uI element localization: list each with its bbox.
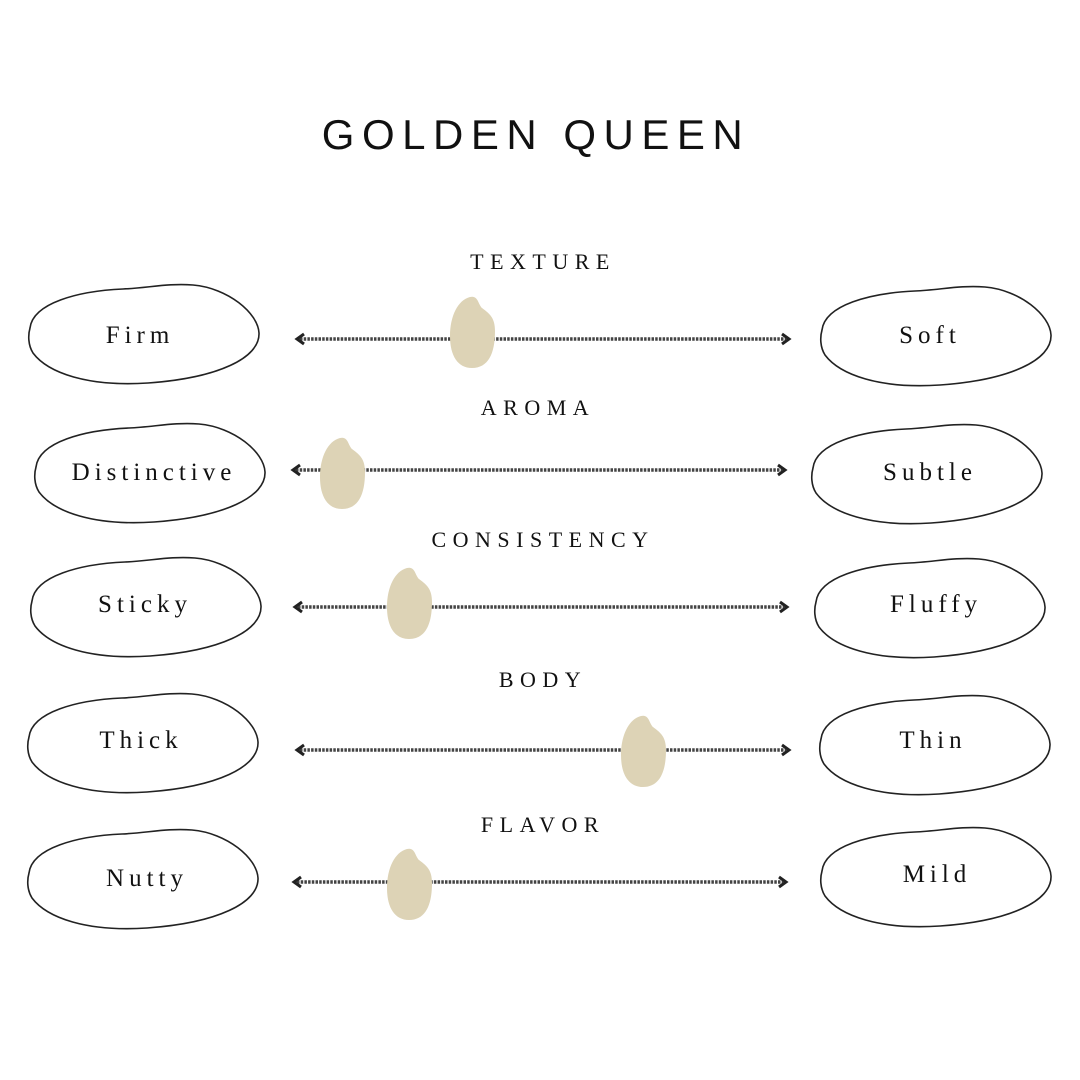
pill: nutty: Nutty xyxy=(106,865,188,892)
row: aroma xyxy=(35,395,1042,524)
pill: mild xyxy=(821,828,1051,927)
heading: aroma: AROMA xyxy=(481,395,595,420)
row: body xyxy=(28,667,1050,795)
pill: distinctive: Distinctive xyxy=(72,459,236,486)
row: texture xyxy=(29,249,1051,386)
title: GOLDEN QUEEN xyxy=(322,111,750,158)
pill: thin: Thin xyxy=(899,727,967,754)
heading: flavor: FLAVOR xyxy=(481,812,605,837)
pill: thick: Thick xyxy=(99,727,183,754)
heading: body: BODY xyxy=(499,667,587,692)
arrow: consistency scale xyxy=(295,602,787,612)
arrow: body scale xyxy=(297,745,789,755)
pill: sticky: Sticky xyxy=(98,591,192,618)
heading: texture: TEXTURE xyxy=(470,249,616,274)
pill: subtle: Subtle xyxy=(883,459,977,486)
pill: nutty xyxy=(28,830,258,929)
pill: soft: Soft xyxy=(899,322,961,349)
pill: soft xyxy=(821,287,1051,386)
pill: firm: Firm xyxy=(106,322,174,349)
pill: fluffy xyxy=(815,559,1045,658)
arrow: aroma scale xyxy=(293,465,785,475)
marker: consistency xyxy=(387,568,432,639)
heading: consistency: CONSISTENCY xyxy=(431,527,655,552)
pill: distinctive xyxy=(35,424,265,523)
marker: texture xyxy=(450,297,495,368)
pill: sticky xyxy=(31,558,261,657)
marker: aroma xyxy=(320,438,365,509)
pill: subtle xyxy=(812,425,1042,524)
row: flavor xyxy=(28,812,1051,929)
pill: thick xyxy=(28,694,258,793)
row: consistency xyxy=(31,527,1045,658)
pill: mild: Mild xyxy=(903,861,971,888)
pill: thin xyxy=(820,696,1050,795)
pill: fluffy: Fluffy xyxy=(890,591,982,618)
marker: body xyxy=(621,716,666,787)
pill: firm xyxy=(29,285,259,384)
arrow: flavor scale xyxy=(294,877,786,887)
marker: flavor xyxy=(387,849,432,920)
arrow: texture scale xyxy=(297,334,789,344)
